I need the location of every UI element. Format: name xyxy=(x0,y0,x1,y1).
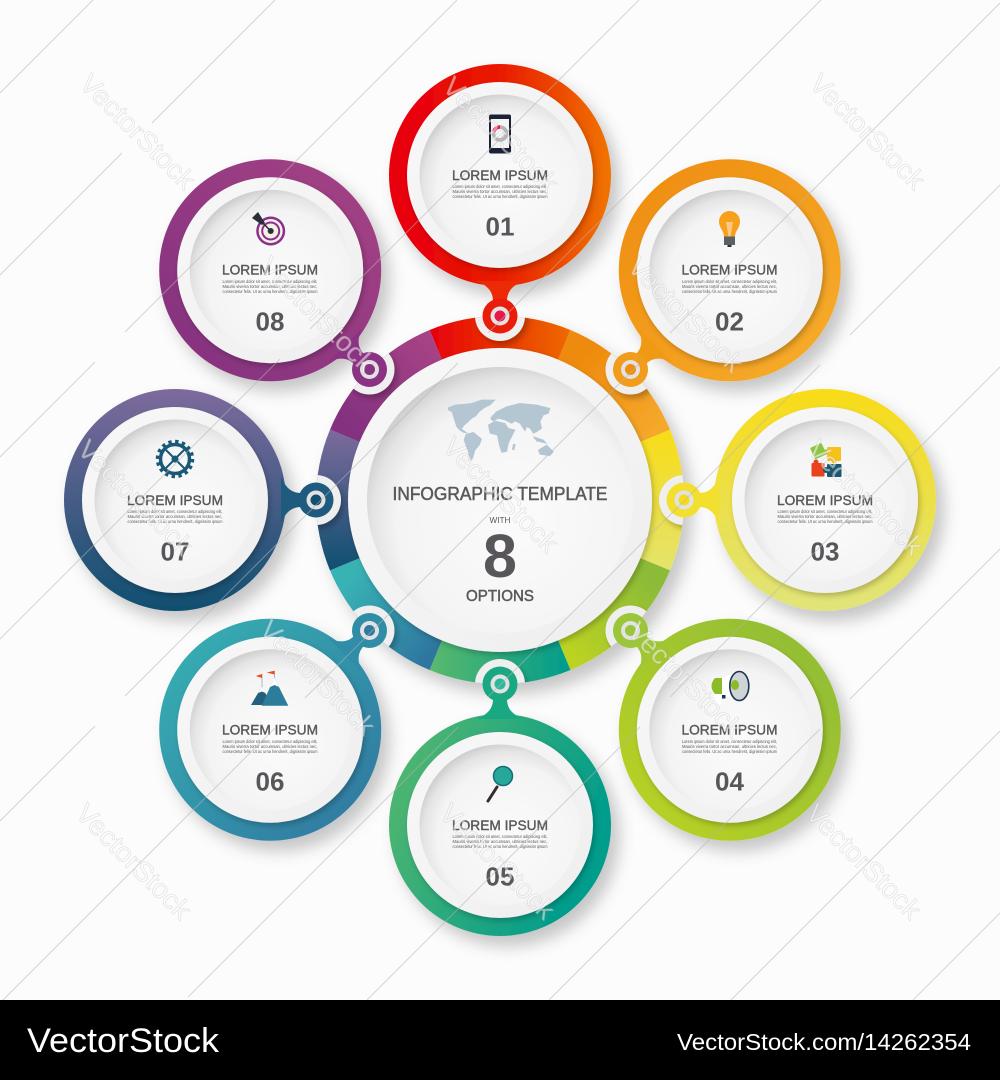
icon: gear xyxy=(158,442,192,476)
option 04: 04 xyxy=(715,766,744,796)
option 05: Lorem ipsum dolor sit amet, consectetur adipiscing elit, xyxy=(452,834,548,840)
watermark overlay: VectorStock xyxy=(254,251,381,379)
option 02: LOREM IPSUM xyxy=(682,262,778,278)
icon: puzzle xyxy=(810,443,842,477)
option 01: LOREM IPSUM xyxy=(452,167,548,183)
option 07 xyxy=(64,389,334,611)
option 01: 01 xyxy=(486,212,514,242)
option 08: Mauris viverra tortor accumsan, ultricies lectus nec, xyxy=(222,284,318,290)
footer brand: VectorStock xyxy=(27,1022,220,1060)
icon: magnifier xyxy=(488,766,512,801)
watermark overlay: VectorStock xyxy=(622,251,749,379)
option 01: Lorem ipsum dolor sit amet, consectetur adipiscing elit, xyxy=(452,184,548,190)
option 02 xyxy=(613,159,841,387)
option 06: 06 xyxy=(256,766,284,796)
option 05 xyxy=(389,666,611,936)
watermark overlay: VectorStock xyxy=(802,434,929,562)
watermark overlay: VectorStock xyxy=(800,798,927,926)
footer url: VectorStock.com/14262354 xyxy=(677,1029,971,1055)
option 07: Mauris viverra tortor accumsan, ultricies lectus nec, xyxy=(128,514,222,520)
central label: options: OPTIONS xyxy=(466,588,534,605)
option 08: 08 xyxy=(256,306,284,336)
option 06: Lorem ipsum dolor sit amet, consectetur adipiscing elit, xyxy=(222,739,318,745)
connector halos cut into the ring xyxy=(291,291,709,709)
option 01: consectetur felis. Ut ac urna hendrerit, dignissim ipsum xyxy=(452,194,548,200)
central white ring xyxy=(348,348,652,652)
watermark overlay: VectorStock xyxy=(622,616,749,744)
central label: with: WITH xyxy=(490,515,510,525)
watermark overlay: VectorStock xyxy=(72,434,199,562)
option 06: LOREM IPSUM xyxy=(222,722,318,738)
option 04: consectetur felis. Ut ac urna hendrerit, dignissim ipsum xyxy=(682,749,777,755)
option 07: consectetur felis. Ut ac urna hendrerit, dignissim ipsum xyxy=(128,519,222,525)
icon: world map xyxy=(448,400,553,461)
option 03: Mauris viverra tortor accumsan, ultricies lectus nec, xyxy=(778,514,872,520)
option 02: Mauris viverra tortor accumsan, ultricies lectus nec, xyxy=(682,284,777,290)
icon: light bulb xyxy=(719,211,740,247)
option 03: consectetur felis. Ut ac urna hendrerit, dignissim ipsum xyxy=(778,519,872,525)
option 02: Lorem ipsum dolor sit amet, consectetur adipiscing elit, xyxy=(682,279,777,285)
option 03: LOREM IPSUM xyxy=(777,492,873,508)
watermark overlay: VectorStock xyxy=(437,431,564,559)
central heading: INFOGRAPHIC TEMPLATE xyxy=(392,484,608,504)
option 02: 02 xyxy=(715,306,744,336)
option 03: 03 xyxy=(811,536,839,566)
option 05: LOREM IPSUM xyxy=(452,817,548,833)
option 07: 07 xyxy=(161,536,189,566)
footer bar xyxy=(0,1000,1000,1080)
option 03: Lorem ipsum dolor sit amet, consectetur adipiscing elit, xyxy=(778,509,872,515)
option 01: Mauris viverra tortor accumsan, ultricies lectus nec, xyxy=(452,189,548,195)
option 08: LOREM IPSUM xyxy=(222,262,318,278)
option 04: Lorem ipsum dolor sit amet, consectetur adipiscing elit, xyxy=(682,739,777,745)
watermark overlay: VectorStock xyxy=(74,68,201,196)
icon: megaphone xyxy=(712,671,749,705)
watermark overlay: VectorStock xyxy=(434,798,561,926)
watermark overlay: VectorStock xyxy=(804,68,931,196)
option 02: consectetur felis. Ut ac urna hendrerit, dignissim ipsum xyxy=(682,289,777,295)
central number 8: 8 xyxy=(483,522,517,590)
option 04: Mauris viverra tortor accumsan, ultricies lectus nec, xyxy=(682,744,777,750)
option 06 xyxy=(159,613,387,841)
option 08: consectetur felis. Ut ac urna hendrerit, dignissim ipsum xyxy=(222,289,318,295)
option 08 xyxy=(159,159,387,387)
icon: mountains with flags xyxy=(251,671,288,706)
option 03 xyxy=(666,389,936,611)
watermark overlay: VectorStock xyxy=(70,798,197,926)
central segmented colour ring xyxy=(316,316,684,684)
option 01 xyxy=(389,64,611,334)
watermark overlay: VectorStock xyxy=(437,71,564,199)
option 06: Mauris viverra tortor accumsan, ultricies lectus nec, xyxy=(222,744,318,750)
icon: smartphone xyxy=(489,114,511,154)
option 04 xyxy=(613,613,841,841)
watermark overlay: VectorStock xyxy=(254,614,381,742)
option 08: Lorem ipsum dolor sit amet, consectetur adipiscing elit, xyxy=(222,279,318,285)
option 05: consectetur felis. Ut ac urna hendrerit, dignissim ipsum xyxy=(452,844,548,850)
option 05: 05 xyxy=(486,862,514,892)
option 04: LOREM IPSUM xyxy=(682,722,778,738)
option 06: consectetur felis. Ut ac urna hendrerit, dignissim ipsum xyxy=(222,749,318,755)
central inner disc xyxy=(367,367,633,633)
option 07: LOREM IPSUM xyxy=(127,492,223,508)
option 05: Mauris viverra tortor accumsan, ultricies lectus nec, xyxy=(452,839,548,845)
option 07: Lorem ipsum dolor sit amet, consectetur adipiscing elit, xyxy=(128,509,222,515)
icon: target with dart xyxy=(252,212,285,246)
